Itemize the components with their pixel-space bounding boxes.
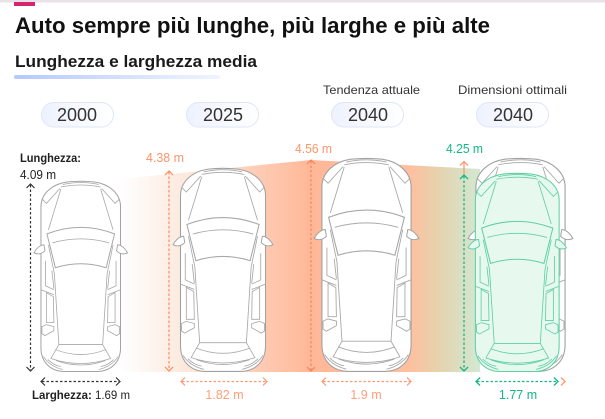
year pill 2000: 2000	[57, 105, 97, 125]
year pill 2025: 2025	[203, 105, 243, 125]
width label 2040 tendenza: 1.9 m	[350, 388, 382, 402]
heading: lunghezza e larghezza media	[14, 53, 258, 79]
year pill 2040 ottimali	[476, 102, 548, 127]
length label 2000: 4.09 m	[20, 168, 56, 182]
width arrow 2000	[41, 378, 120, 386]
car 2040 tendenza	[314, 158, 419, 371]
car 2040 ottimali	[468, 173, 566, 371]
width label 2000: Larghezza: 1.69 m	[32, 388, 130, 402]
label: dimensioni ottimali: Dimensioni ottimali	[458, 83, 567, 97]
year pill 2040 tendenza	[332, 102, 404, 127]
year pill 2025	[186, 102, 258, 127]
car 2000	[34, 181, 128, 372]
width arrow 2040 tendenza	[322, 378, 411, 386]
length arrows 2040 ottimali	[460, 162, 468, 371]
heading: lunghezza e larghezza media: Lunghezza e larghezza media	[15, 53, 258, 71]
gradient band behind cars	[120, 160, 480, 372]
width label 2040 ottimali: 1.77 m	[499, 388, 537, 402]
car 2025	[173, 168, 273, 371]
width arrow 2025	[181, 378, 267, 386]
length label 2025: 4.38 m	[146, 151, 184, 165]
top strip	[0, 0, 605, 2]
length label 2000: Lunghezza:	[20, 153, 81, 165]
accent bar	[14, 2, 35, 6]
length label 2040 tendenza: 4.56 m	[295, 142, 332, 156]
year pill 2040 tendenza: 2040	[348, 105, 388, 125]
length arrow 2040 tendenza	[307, 160, 315, 371]
width arrow 2040 ottimali	[476, 378, 565, 386]
label: tendenza attuale: Tendenza attuale	[323, 83, 420, 97]
year pill 2040 ottimali: 2040	[493, 105, 533, 125]
length arrow 2000	[26, 184, 34, 371]
width label 2025: 1.82 m	[205, 388, 244, 402]
length label 2000	[20, 153, 81, 182]
year pill 2000	[42, 102, 114, 127]
title: Auto sempre più lunghe, più larghe e più alte	[15, 13, 490, 38]
length label 2040 ottimali: 4.25 m	[446, 142, 483, 156]
car 2040 ghost outline	[468, 158, 573, 371]
length arrow 2025	[165, 171, 173, 371]
